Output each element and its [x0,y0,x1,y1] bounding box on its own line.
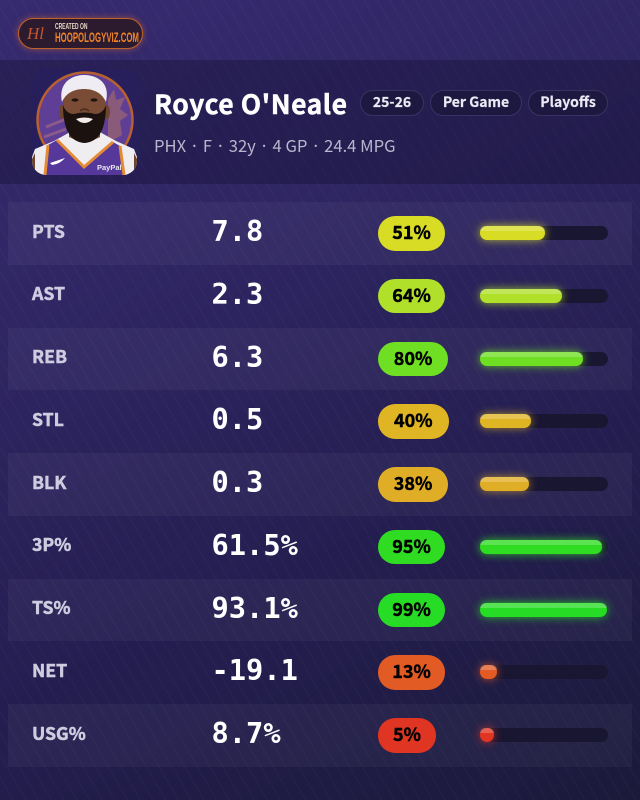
row: NET: NET [32,657,67,683]
row: AST: 64% [392,282,431,308]
tag: season [360,90,424,116]
row: USG% [8,704,632,767]
row: PTS: 51% [392,219,431,245]
row: USG%: 5% [393,721,421,747]
row: AST: 2.3 [212,277,263,311]
row: TS% [8,578,632,641]
badge: created on hoopologyviz.com: Hl [27,24,44,43]
row: PTS: 7.8 [212,214,263,248]
row: REB: REB [32,343,67,369]
tag: per game [430,90,522,116]
row: TS%: 99% [392,596,431,622]
row: REB: 80% [394,344,432,370]
badge: created on hoopologyviz.com: CREATED ON [55,22,87,31]
row: 3P%: 3P% [32,531,71,557]
player portrait [32,69,137,175]
row: 3P%: 61.5% [212,528,298,562]
row: STL: 0.5 [212,402,263,436]
row: NET: -19.1 [212,653,298,687]
row: TS%: TS% [32,594,71,620]
row: USG%: 8.7% [212,716,281,750]
row: NET [32,653,608,690]
row: BLK: 0.3 [212,465,263,499]
row: BLK [8,453,632,516]
row: NET: 13% [392,658,431,684]
tag: playoffs [528,90,608,116]
row: REB: 6.3 [212,340,263,374]
tag: season: 25-26 [373,92,411,112]
row: PTS [8,202,632,265]
row: 3P%: 95% [392,533,431,559]
player name: Royce O'Neale [154,83,348,122]
row: STL: STL [32,406,64,432]
row: 3P% [32,528,608,564]
player portrait: PayPal [97,163,122,172]
row: AST [32,277,608,313]
badge: created on hoopologyviz.com [18,18,143,49]
badge: created on hoopologyviz.com: HOOPOLOGYVIZ.COM [55,30,139,45]
row: AST: AST [32,280,65,306]
row: BLK: BLK [32,468,66,494]
row: STL [32,402,608,439]
row: REB [8,328,632,390]
row: STL: 40% [394,407,433,433]
tag: playoffs: Playoffs [540,92,596,112]
row: TS%: 93.1% [212,590,298,624]
row: PTS: PTS [32,218,65,244]
row: BLK: 38% [394,470,432,496]
row: USG%: USG% [32,720,86,746]
player meta line: PHX · F · 32y · 4 GP · 24.4 MPG [154,133,396,157]
tag: per game: Per Game [443,92,509,112]
